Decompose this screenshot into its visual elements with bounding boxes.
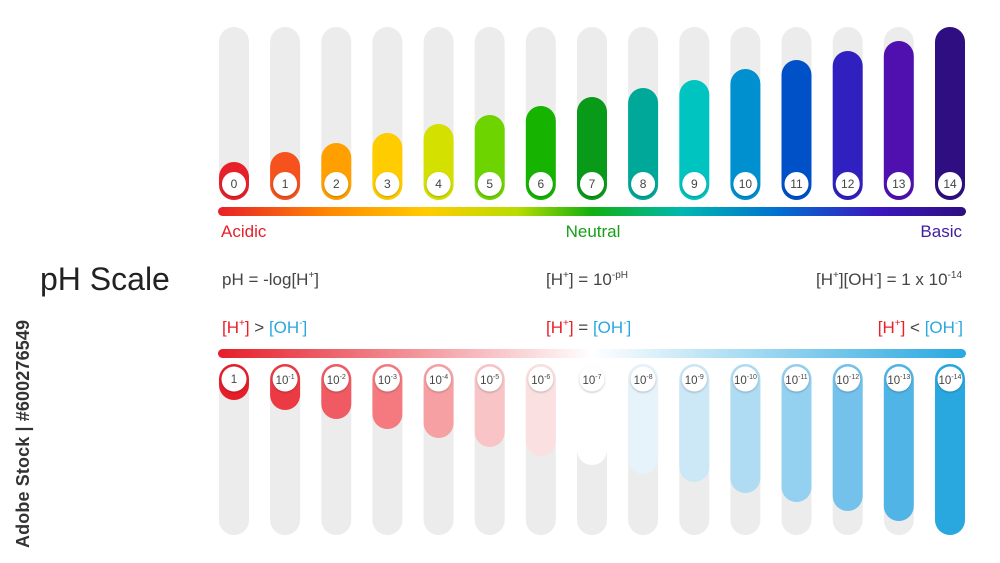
formulas: [H [546,270,563,289]
comparisons: [H [878,318,895,337]
comparisons: + [563,318,569,329]
formulas: -pH [612,270,628,281]
top chart: pH bars: 8 [640,177,647,191]
formulas: pH = -log[H [222,270,308,289]
top chart: pH bars: 10 [739,177,752,191]
bottom chart: H+ concentration bars: 10 [276,375,288,387]
top chart: pH bars: 13 [892,177,906,191]
top chart: pH bars: 7 [589,177,596,191]
top chart: pH bars [219,27,965,200]
top chart: pH bars: 1 [282,177,289,191]
bottom chart: H+ concentration bars: -13 [900,374,910,381]
bottom chart: H+ concentration bars: 10 [582,375,595,387]
formulas: - [874,270,877,281]
bottom chart: H+ concentration bars: 10 [634,375,646,387]
bottom chart: H+ concentration bars: 10 [429,375,442,387]
bottom chart: H+ concentration bars: 10 [378,375,391,387]
bottom chart: H+ concentration bars: -3 [391,374,397,381]
bottom chart: H+ concentration bars: -11 [798,374,808,381]
top chart: pH bars: 14 [943,177,957,191]
pH gradient bar [218,207,966,216]
formulas: -14 [948,270,962,281]
comparisons: - [623,318,627,329]
bottom chart: H+ concentration bars: -6 [544,374,550,381]
bottom chart: H+ concentration bars: 10 [785,375,798,387]
label: Neutral: Neutral [566,222,620,241]
bottom chart: H+ concentration bars: 10 [939,375,951,387]
bottom chart: H+ concentration bars: -4 [442,374,448,381]
bottom chart: H+ concentration bars [219,364,965,535]
comparisons: - [955,318,958,329]
concentration gradient bar [218,349,966,358]
comparisons: ] [627,318,631,337]
bottom chart: H+ concentration bars: 10 [327,375,340,387]
comparisons: ] [569,318,574,337]
formulas: ] [314,270,319,289]
formulas: ] = 10 [569,270,612,289]
comparisons [222,318,963,337]
label: Basic: Basic [920,222,962,241]
title: pH Scale [40,261,170,297]
comparisons: ] [958,318,963,337]
formulas [222,270,962,289]
formulas: + [308,270,314,281]
bottom chart: H+ concentration bars: -12 [849,374,859,381]
formulas: ][OH [839,270,874,289]
bottom chart: H+ concentration bars: -14 [951,374,962,381]
bottom chart: H+ concentration bars: 10 [734,375,747,387]
top chart: pH bars: 6 [537,177,544,191]
comparisons: + [239,318,245,329]
label: Acidic: Acidic [221,222,267,241]
top chart: pH bars: 12 [841,177,855,191]
bottom chart: H+ concentration bars: 10 [836,375,849,387]
bottom chart: H+ concentration bars: 10 [480,375,493,387]
top chart: pH bars: 3 [384,177,391,191]
bottom chart: H+ concentration bars: -8 [646,374,653,381]
bottom chart: H+ concentration bars: 1 [231,374,237,386]
comparisons: - [299,318,303,329]
bottom chart: H+ concentration bars: 10 [531,375,544,387]
top chart: pH bars: 11 [790,177,803,191]
bottom chart: H+ concentration bars: -5 [493,374,499,381]
comparisons: < [OH [910,318,955,337]
top chart: pH bars: 4 [435,177,442,191]
formulas: + [833,270,839,281]
comparisons: = [OH [578,318,623,337]
top chart: pH bars: 5 [486,177,493,191]
formulas: [H [816,270,833,289]
bottom chart: H+ concentration bars: -9 [698,374,704,381]
bottom chart: H+ concentration bars: -7 [595,374,602,381]
comparisons: [H [546,318,563,337]
comparisons: ] [245,318,250,337]
bottom chart: H+ concentration bars: 10 [685,375,698,387]
comparisons: + [895,318,901,329]
comparisons: ] [901,318,905,337]
comparisons: [H [222,318,239,337]
comparisons: > [OH [254,318,299,337]
bottom chart: H+ concentration bars: -1 [288,374,295,381]
formulas: + [563,270,569,281]
top chart: pH bars: 0 [231,177,238,191]
comparisons: ] [303,318,307,337]
formulas: ] = 1 x 10 [877,270,948,289]
top chart: pH bars: 9 [691,177,698,191]
top chart: pH bars: 2 [333,177,340,191]
watermark text: Adobe Stock id: Adobe Stock | #600276549 [13,320,33,548]
bottom chart: H+ concentration bars: -10 [747,374,757,381]
bottom chart: H+ concentration bars: 10 [887,375,900,387]
bottom chart: H+ concentration bars: -2 [340,374,346,381]
